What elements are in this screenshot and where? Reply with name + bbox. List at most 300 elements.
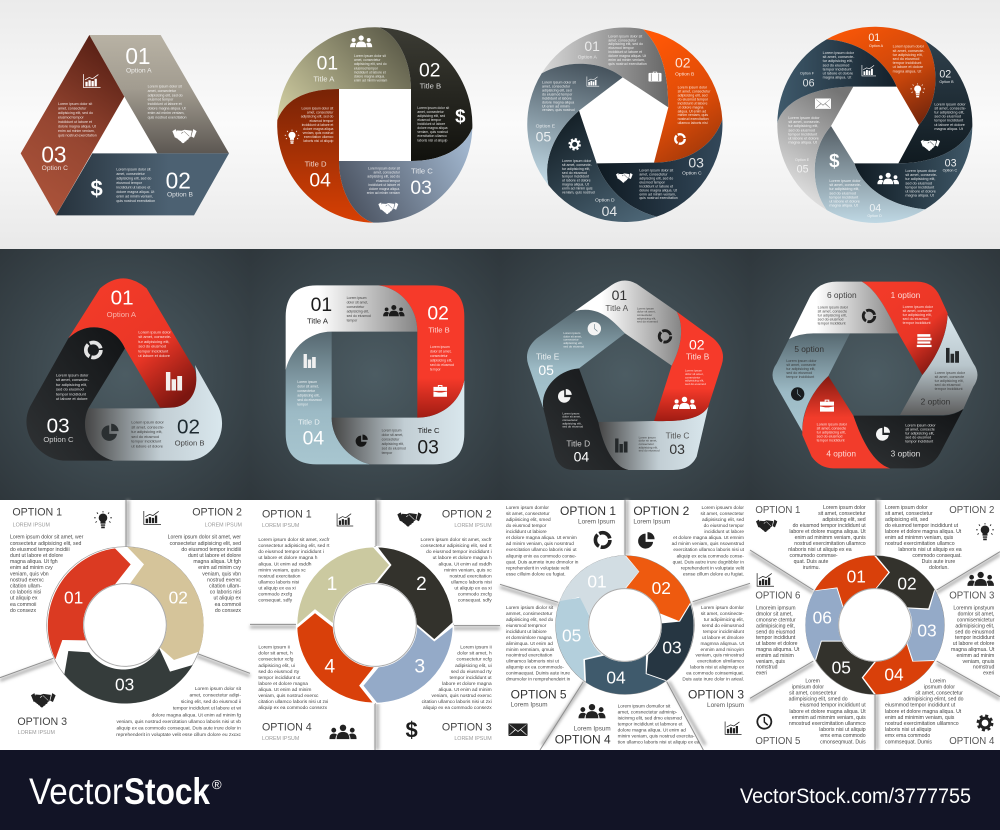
label 03 Option C: Option C <box>682 171 702 177</box>
heading option 1 <box>262 509 312 529</box>
text block option 3: exeri <box>983 671 994 677</box>
text block option 1: nlaboris nisi ut aliquip ex ea <box>788 547 852 553</box>
text block 2: tur adipisicing elit, <box>935 379 964 383</box>
label 01 Option A: 01 <box>868 32 880 44</box>
label 01 Title A <box>313 53 338 83</box>
number 4: 4 <box>324 656 335 677</box>
text block 03: magna aliqua. Ut <box>905 194 935 198</box>
text block 02: ut labore et dolore <box>934 123 965 127</box>
heading option 2 <box>442 509 492 529</box>
text block option 3: Duis aute irure dolor in arieal. <box>682 677 744 683</box>
text block option 5: ammet, consimectetur <box>506 611 553 617</box>
label 1 option: 1 option <box>891 290 921 300</box>
arrow segment 04 orange <box>863 644 934 694</box>
text block option 5: laboris nisi ut aliquip <box>819 727 866 733</box>
icon: cycle <box>595 533 610 547</box>
text block 02: tempor incididunt <box>934 119 964 123</box>
text block option 3: citation ullamco laboris nisi ut zxi <box>422 699 492 705</box>
text block option 3: sicing elit, sed do eiusmod ii <box>181 699 241 705</box>
segment 02 orange <box>643 29 722 163</box>
text block option 3: veniam, quis nostrud exercitation ullamco laboris nisi ut vb <box>116 719 241 725</box>
heading option 2: OPTION 2 <box>442 509 492 521</box>
text block option 1: co laboris nisi <box>10 590 41 596</box>
text block 02: do eiusmod tempor <box>678 97 709 101</box>
text block option 4: dolor sit amet, h <box>258 651 293 657</box>
text block option 5: Lorem <box>805 678 820 684</box>
text block 05: dolore magna aliqua <box>542 100 574 104</box>
text block option 3: ea commodo coinsemiquat. <box>686 671 744 677</box>
heading option 6: OPTION 6 <box>755 590 800 601</box>
label 04 Title D: Title D <box>305 160 327 169</box>
text block 3: tur adipisicing elit, <box>905 431 934 435</box>
label 05 Option E: 05 <box>797 164 809 176</box>
text block 02: adipisicing elit, <box>685 379 704 383</box>
text block option 3: tempor incididunt <box>955 635 995 641</box>
text block 01: Lorem ipsum dolor sit <box>608 34 642 38</box>
icon: bars <box>166 372 182 391</box>
text block option 3: reprehenderit in voluptate velit esse cillum dolore eu zxcxc <box>116 732 242 738</box>
number 04: 04 <box>606 667 626 687</box>
segment 03 black <box>26 327 125 461</box>
heading option 1: OPTION 1 <box>262 509 312 521</box>
segment 01 white <box>286 285 417 370</box>
segment 01 white <box>575 280 681 366</box>
text block option 3: aliquip ex ea commodo consezx <box>423 705 492 711</box>
text block option 2: ullamco laboris nisi <box>451 579 492 585</box>
text block option 3: aliqua. Ut enim ad minim <box>439 687 492 693</box>
number 05: 05 <box>832 658 851 678</box>
label 02 Option B: 02 <box>675 54 691 70</box>
text block 03: ut labore et dolore <box>56 396 88 401</box>
text block C: enim ad minim veniam, <box>58 129 95 133</box>
icon: chart <box>862 65 876 76</box>
text block option 4: sit amet, consectetur <box>915 691 963 697</box>
text block option 1: minim veniam, quis xc <box>258 567 306 573</box>
text block 03: eiusmod tempor <box>639 180 666 184</box>
heading option 1: OPTION 1 <box>560 504 616 518</box>
text block 01: Lorem ipsum <box>637 306 655 310</box>
arrow segment 02 dark <box>876 556 934 608</box>
icon: cycle <box>659 331 671 342</box>
text block 1: tur adipisicing elit, <box>903 313 932 317</box>
text block 03: quis nostrud exercitation <box>639 196 678 200</box>
segment 01 orange <box>827 27 935 125</box>
text block option 4: enim ad minimim veniam, quis <box>885 715 955 721</box>
label 05 Option E: Option E <box>536 123 556 129</box>
segment 02 light <box>85 365 222 461</box>
text block option 1: ea commoii <box>10 602 36 608</box>
text block 05: Lorem ipsum dolor sit <box>542 81 576 85</box>
text block option 1: do eiusmod tempor incididunt ut <box>793 523 866 529</box>
text block 03: sed do eiusmod <box>382 447 406 451</box>
text block 01: Lorem ipsum <box>347 296 367 300</box>
label 03 Option C: 03 <box>47 414 70 437</box>
arrow segment 01 red <box>48 548 131 659</box>
text block option 2: adipisicing elit, sed <box>885 517 928 523</box>
label 03 Option C: 03 <box>945 157 957 169</box>
number 03: 03 <box>115 675 134 695</box>
text block 01: incididunt ut labore et <box>608 50 642 54</box>
text block option 3: Lorem ipsum ii <box>460 645 492 651</box>
label 02 Title B: Title B <box>686 352 710 362</box>
text block 6: sed do eiusmod <box>818 318 843 322</box>
text block option 1: ut labore et dolore magna h <box>258 555 318 561</box>
text block 02: incididunt ut labore <box>678 101 707 105</box>
label 01 Title A <box>307 295 332 325</box>
text block option 6: enmim ad minim <box>756 653 794 659</box>
text block 02: consectetur <box>685 375 700 379</box>
segment 03 dark slate <box>854 127 972 209</box>
label 03 Option C: 03 <box>688 154 704 170</box>
label 04 Title D: Title D <box>298 417 320 426</box>
segment 04 light blue <box>815 126 925 223</box>
text block option 5: emmim ad minmim veniam, quis <box>792 715 866 721</box>
label 04 Title D: 04 <box>303 428 324 449</box>
icon: dollar: $ <box>455 105 466 126</box>
text block 02: Lorem ipsum <box>685 369 703 373</box>
icon: bars <box>304 354 316 368</box>
label 03 Option C: Option C <box>42 165 68 172</box>
text block option 1: consectetur adipisicing elit, sed rt <box>258 543 330 549</box>
text block option 3: enimm ad minim <box>957 653 994 659</box>
text block C: incididunt ut labore et <box>58 120 92 124</box>
text block option 3: tempor incididunt ut labore et wi <box>173 706 241 712</box>
text block 03: adipisicing elit, <box>382 442 404 446</box>
arrow segment 04 slate <box>585 655 666 694</box>
text block 01: sit amet, consecte- <box>893 49 925 53</box>
label 06 Option F: 06 <box>803 78 815 90</box>
text block 01: adipisicing elit, <box>637 316 656 320</box>
text block option 6: Lmoreim ipmsum <box>756 606 796 612</box>
label 02 Option B <box>175 415 204 447</box>
icon: pie <box>356 435 368 447</box>
icon: suitcase <box>648 72 662 82</box>
heading option 3: LOREM IPSUM <box>454 736 492 742</box>
text block 05: Lorem ipsum <box>563 331 581 335</box>
icon: cycle <box>863 310 875 322</box>
label 01 Option A: 01 <box>125 43 151 69</box>
label 02 Option B: Option B <box>167 191 193 198</box>
segment 05 slate <box>527 310 625 408</box>
text block option 2: do eiusmod tempor incididunt ut <box>885 523 959 529</box>
text block 02: Lorem ipsum dolor <box>131 420 165 425</box>
text block 01: ut labore et dolore <box>138 353 170 358</box>
text block 04: ut labore et dolore <box>562 179 591 183</box>
text block option 5: ulimamco labmoris nisi ut <box>506 659 560 665</box>
text block 03: sit amet, consecte- <box>905 173 938 177</box>
label 02 Title B: Title B <box>420 82 441 91</box>
text block option 1: ullamco laboris nisi <box>258 579 299 585</box>
label 03 Option C <box>43 414 74 444</box>
text block 5: sit amet, consecte <box>786 363 816 367</box>
text block option 2: exercitation ullamco laboris nisi ut <box>673 547 745 553</box>
icon: people <box>967 572 994 586</box>
text block 03: Lorem ipsum dolor sit <box>639 169 673 173</box>
text block B: exercitation ullamco <box>417 134 447 138</box>
text block 2: tempor incididunt <box>935 387 963 391</box>
text block option 6: tempor incididunt <box>756 635 796 641</box>
label 04 Option D <box>595 198 617 219</box>
text block 05: consectetur <box>563 338 579 342</box>
label 01 Option A: 01 <box>584 38 600 54</box>
text block C: eiusmod tempor <box>58 115 84 119</box>
text block B: amet, consectetur <box>417 110 445 114</box>
number 05: 05 <box>562 626 581 646</box>
label 01 Option A: Option A <box>107 310 137 319</box>
label 04 Title D: 04 <box>309 171 331 192</box>
text block A: dolore magna aliqua. Ut <box>148 107 186 111</box>
footer logo: Vector <box>29 771 123 812</box>
segment 03 dark <box>597 119 722 217</box>
text block option 5: nooimtrud exercitation <box>506 653 553 659</box>
text block 4: tur adipisicing elit, <box>817 431 846 435</box>
text block 6: tur adipisicing elit, <box>818 314 847 318</box>
text block option 1: et dolore magna aliqua. Ut emnim <box>506 535 577 541</box>
text block 06: sed do eiusmod <box>823 63 849 67</box>
text block 03: sed do eiusmod <box>56 387 84 392</box>
text block 05: tur adipisicing elit, <box>788 124 818 128</box>
label 03 Title C <box>666 431 689 457</box>
text block D: laboris nisi ut aliquip <box>303 139 333 143</box>
icon: light bulb <box>976 523 994 540</box>
text block 04: sed do eiusmod <box>562 425 584 429</box>
number 02: 02 <box>652 578 671 598</box>
text block 1: sit amet, consecte <box>903 309 932 313</box>
text block 04: consectetur <box>562 418 578 422</box>
icon: clock <box>756 714 772 730</box>
heading option 2: LOREM IPSUM <box>205 522 242 528</box>
footer logo: ® <box>212 777 222 792</box>
label 04 Option D: 04 <box>869 202 881 214</box>
heading option 4: OPTION 4 <box>262 721 312 733</box>
text block 01: enim ad minim veniam, <box>608 58 645 62</box>
arrow segment 03 blue <box>907 591 944 661</box>
text block 01: eiusmod tempor <box>608 46 635 50</box>
label 03 Title C: Title C <box>411 167 433 176</box>
diagram: arrow ring with six options <box>750 500 1000 750</box>
text block option 2: ut aliquip ex <box>213 596 241 602</box>
text block 03: ut labore et dolore <box>905 189 936 193</box>
text block option 2: Lorem ipsum dolor <box>885 505 928 511</box>
heading option 4: OPTION 4 <box>555 733 611 747</box>
segment 06 slate <box>777 39 897 123</box>
label 02 Option B: Option B <box>175 438 204 447</box>
text block 2: Lorem ipsum dolor <box>935 371 966 375</box>
text block option 2: ut aliquip ex ea xi <box>454 586 492 592</box>
text block 03: consectetur <box>639 442 654 446</box>
text block option 5: adimpisicing elit, smed do <box>789 697 848 703</box>
label 01 Option A: 01 <box>111 287 134 310</box>
text block option 6: adimipisicing elit, <box>756 623 795 629</box>
text block option 4: tempor incididunt ut <box>258 675 301 681</box>
heading option 3: LOREM IPSUM <box>18 730 55 736</box>
text block option 2: aliquip ex ecia commodo conse- <box>677 553 744 559</box>
text block 02: aliqua. Ut enim ad <box>678 109 706 113</box>
arrow segment 1 olive <box>297 547 390 626</box>
text block option 1: citation ullam- <box>10 583 42 589</box>
label 02 Option B: Option B <box>939 80 954 84</box>
number 06: 06 <box>813 607 832 627</box>
text block option 1: quat. Duis aute <box>794 559 828 565</box>
arrow segment 05 light blue <box>556 598 602 681</box>
text block option 2: labore et dolore magna aliqua. Ut <box>885 529 962 535</box>
icon: cycle <box>86 342 101 357</box>
icon: light bulb <box>94 511 112 528</box>
heading option 2 <box>192 507 242 528</box>
segment 04 black <box>543 368 628 470</box>
heading option 5: OPTION 5 <box>755 736 800 747</box>
text block option 1: dunt ut labore et dolore <box>10 553 63 559</box>
text block C: quis nostrud exercitation <box>58 133 97 137</box>
text block option 5: minim vemniam, qmuis <box>506 647 555 653</box>
text block option 2: co laboris nisi <box>210 590 241 596</box>
text block 04: Lorem ipsum <box>562 411 580 415</box>
text block option 1: esse cilluim dolore eu fugiat. <box>506 571 566 577</box>
heading option 4 <box>262 721 312 742</box>
text block 01: tempor incididunt <box>893 61 922 65</box>
diagram: arrow ring with three options <box>0 500 250 738</box>
icon: list <box>917 334 932 347</box>
segment 3 option black <box>853 409 963 468</box>
text block 5: tur adipisicing elit, <box>786 367 815 371</box>
text block option 2: aliqua. Ut enim ad xsddh <box>439 561 492 567</box>
text block 01: dolore magna aliqua. Ut <box>608 54 646 58</box>
label 02 Option B: 02 <box>939 68 951 80</box>
heading option 4: Lorem Ipsum <box>574 726 611 733</box>
text block option 2: veniam, quis vbn <box>202 571 241 577</box>
text block 02: Lorem ipsum <box>430 345 450 349</box>
text block 02: sit amet, consectetur <box>678 90 711 94</box>
text block 05: dolor sit amet, <box>563 334 582 338</box>
segment C blue-grey <box>339 128 472 223</box>
text block 01: dolor sit amet, <box>637 310 656 314</box>
text block 01: sed do eiusmod <box>138 344 166 349</box>
text block option 1: irurimu. <box>803 565 820 571</box>
icon: bars <box>946 348 959 363</box>
text block option 3: Loremm ipnstyum <box>953 606 994 612</box>
text block 01: sed do eiusmod <box>347 314 371 318</box>
text block 03: Lorem ipsum dolor <box>56 372 89 377</box>
heading option 3 <box>688 687 744 709</box>
text block 01: sed do eiusmod <box>637 320 658 324</box>
segment 1 option red <box>862 282 948 375</box>
text block option 4: sed do eiusmod rty <box>258 669 300 675</box>
text block option 3: veniam, quis nostrud exerxc <box>432 693 492 699</box>
segment 6 option white <box>789 282 898 339</box>
icon: pie <box>876 427 890 441</box>
text block 02: nostrud exercitation <box>678 117 709 121</box>
icon: bars <box>615 438 628 453</box>
text block 06: sit amet, consecte- <box>823 55 855 59</box>
text block B: veniam, quis nostrud <box>417 130 448 134</box>
text block option 1: quat. Duis aumnte irure dmnolor in <box>506 559 579 565</box>
text block option 6: dmolor sit amet, <box>756 612 793 618</box>
label 04 Title D: Title D <box>566 438 590 448</box>
text block 03: enim ad minim veniam, <box>639 192 676 196</box>
text block 03: tempor incididunt <box>905 185 935 189</box>
text block option 4: aliquip ex ea commodo consezx <box>258 705 328 711</box>
segment 02 dark <box>898 41 972 163</box>
text block option 2: minim veniam, quis xc <box>444 567 492 573</box>
text block 03: dolor sit amet, <box>639 439 657 443</box>
text block option 4: tempor incididunt ut labmore et <box>618 722 683 728</box>
text block 05: Lorem ipsum dolor <box>788 116 820 120</box>
icon: chart <box>337 513 353 526</box>
segment A grey <box>89 35 229 153</box>
label 02 Option B: 02 <box>177 415 200 438</box>
middle dark background <box>0 249 1000 500</box>
text block option 3: tempor incidimidunt <box>703 629 745 635</box>
text block C: amet, consectetur <box>374 171 401 175</box>
text block option 1: magna aliqua. Ut fgh <box>10 559 58 565</box>
text block 02: consectetur <box>430 354 449 358</box>
number 01: 01 <box>587 571 607 591</box>
text block 04: sed do eiusmod <box>562 171 587 175</box>
text block 02: sit amet, consecte- <box>934 106 967 110</box>
text block 01: Lorem ipsum dolor <box>893 45 925 49</box>
text block 05: do eiusmod tempor <box>542 92 573 96</box>
text block 05: sed do eiusmod <box>788 128 815 132</box>
text block option 3: consectetur xcfg <box>457 657 492 663</box>
text block option 5: conimaequat. Duinis aute irure <box>506 671 570 677</box>
label 01 Title A: Title A <box>605 303 629 313</box>
text block 04: sit amet, consecte- <box>829 183 862 187</box>
label 02 Title B: 02 <box>689 336 705 352</box>
text block B: dolore magna aliqua. Ut <box>116 190 154 194</box>
text block B: Lorem ipsum dolor sit <box>417 106 449 110</box>
icon: people <box>877 173 899 184</box>
text block D: eiusmod tempor <box>309 119 334 123</box>
label 01 Title A: 01 <box>317 53 338 74</box>
heading option 2: OPTION 2 <box>192 507 242 519</box>
text block 03: tempor incididunt <box>56 391 87 396</box>
text block option 4: ipsmum dolor <box>924 684 955 690</box>
text block option 2: reprehenderit in voluptate velit <box>681 565 745 571</box>
text block B: dolore magna aliqua <box>417 126 448 130</box>
text block 05: veniam, quis nostrud <box>542 108 575 112</box>
text block 4: Lorem ipsum dolor <box>817 423 848 427</box>
arrow segment 02 orange <box>626 556 690 621</box>
text block option 1: aliqua. Ut enim ad xsddh <box>258 561 312 567</box>
text block option 1: sit amet, consectetur <box>818 511 866 517</box>
text block option 3: sed do eiusmod rty <box>451 669 492 675</box>
text block 04: consectetur <box>297 389 316 393</box>
heading option 2: OPTION 2 <box>633 504 690 518</box>
text block option 5: ipmisum dolor <box>792 684 824 690</box>
diagram: arrow ring with four options <box>250 500 500 750</box>
label 05 Option E <box>536 123 556 144</box>
text block option 3: laboris nisi ut aliqimuip ex <box>690 665 745 671</box>
heading option 3 <box>442 721 492 742</box>
text block option 3: sit amet, consinecte- <box>701 611 744 617</box>
text block 03: tempor <box>382 451 393 455</box>
segment 5 option slate <box>772 333 850 432</box>
label 06 Option F: Option F <box>800 72 815 76</box>
arrow segment 03 navy <box>647 604 694 680</box>
text block 04: tur adipisicing elit, <box>562 167 590 171</box>
text block option 3: tempor incididunt ut <box>450 675 492 681</box>
text block option 3: ut labore et dmolore <box>702 635 744 641</box>
text block 01: consectetur <box>347 305 365 309</box>
heading option 1: OPTION 1 <box>12 507 62 519</box>
text block A: quis nostrud exercitation <box>148 116 186 120</box>
heading option 3: OPTION 3 <box>949 590 994 601</box>
segment 04 slate <box>547 111 657 222</box>
text block A: amet, consectetur <box>354 58 381 62</box>
text block option 6: veniam, quis <box>756 659 785 665</box>
text block A: enim ad minim veniam <box>354 79 388 83</box>
text block option 2: do eiusmod tempor incididunt i <box>426 549 492 555</box>
